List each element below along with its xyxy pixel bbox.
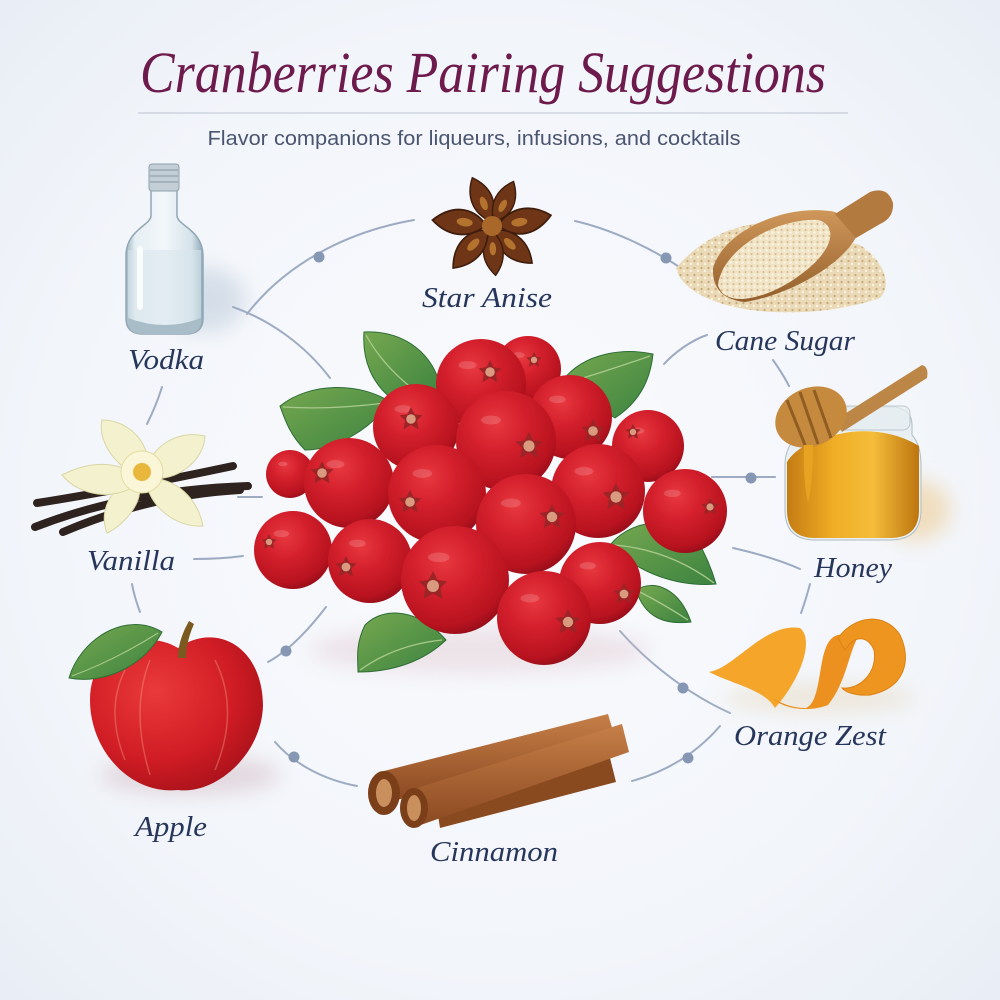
berry calyxes: [261, 352, 719, 633]
label: vanilla: Vanilla: [87, 545, 175, 577]
leaf veins: [283, 335, 714, 670]
icon: vodka bottle: [126, 164, 245, 334]
icon: cane sugar with scoop: [676, 190, 893, 312]
icon: cinnamon sticks: [368, 714, 629, 828]
label: cane sugar: Cane Sugar: [715, 325, 856, 357]
icon: star anise: [431, 174, 553, 276]
label: cinnamon: Cinnamon: [430, 836, 558, 868]
label: apple: Apple: [133, 811, 207, 843]
connectors: [132, 220, 810, 786]
berries: [495, 336, 561, 402]
icon: vanilla flower and pods: [35, 420, 248, 533]
label: orange zest: Orange Zest: [734, 720, 887, 752]
label: honey: Honey: [813, 552, 892, 584]
subtitle: Flavor companions for liqueurs, infusions, and cocktails: [208, 128, 740, 150]
icon: honey jar with dipper: [765, 365, 950, 540]
title: Cranberries Pairing Suggestions: [140, 40, 826, 105]
leaves: [280, 332, 716, 672]
icon: orange zest: [709, 619, 915, 712]
icon: apple: [69, 621, 280, 795]
cluster shadow: [310, 626, 650, 674]
label: vodka: Vodka: [128, 344, 204, 376]
center: cranberry cluster: [254, 332, 727, 674]
label: star anise: Star Anise: [422, 282, 552, 314]
